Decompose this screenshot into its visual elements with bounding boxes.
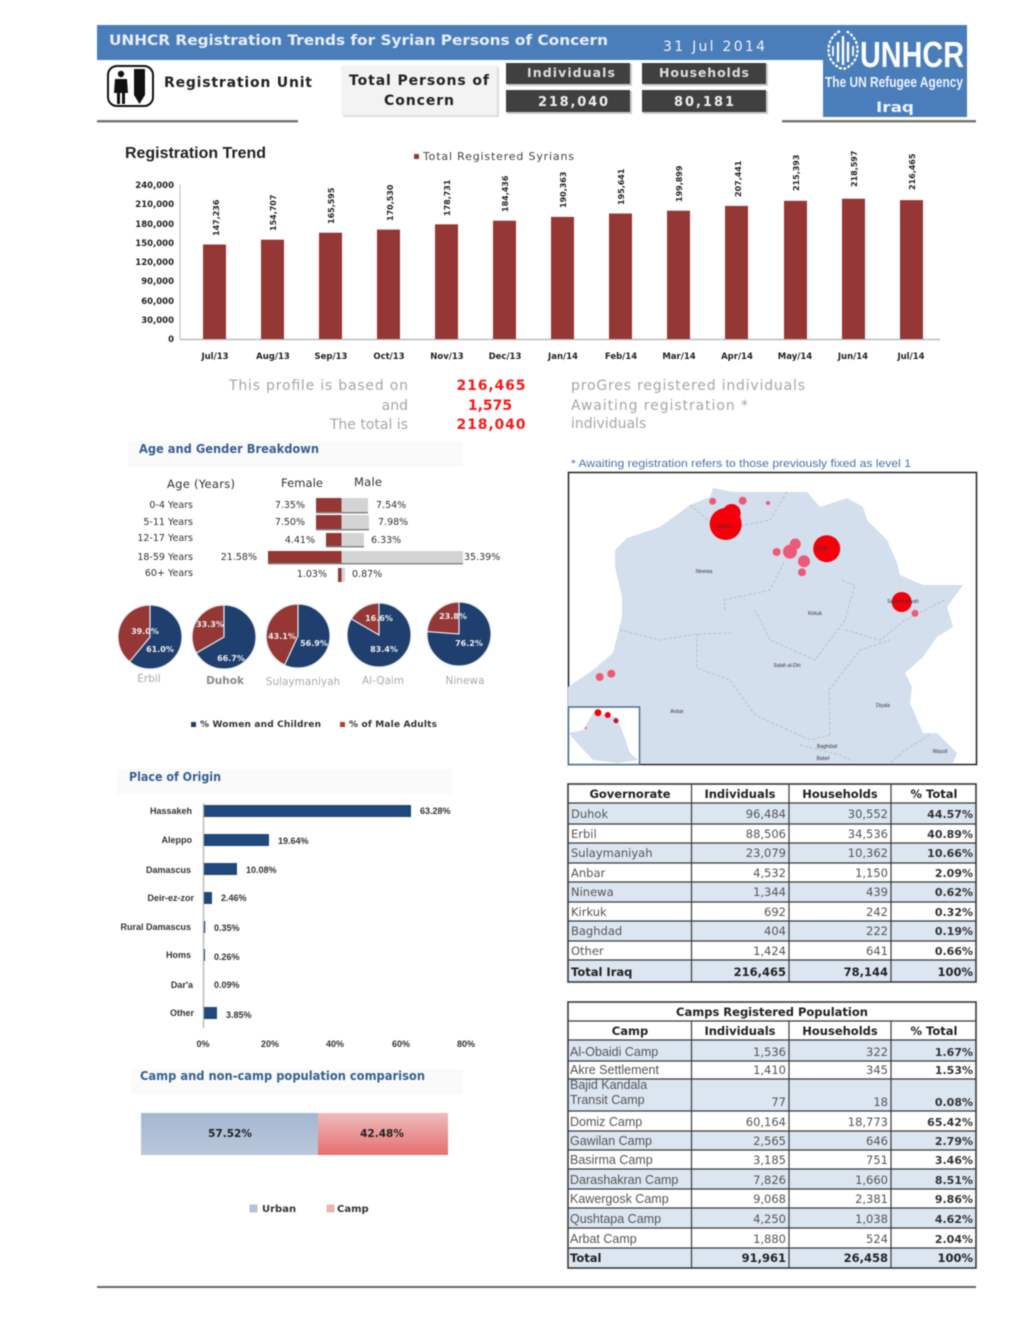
age and gender pyramid: 18-59 Years bbox=[137, 552, 193, 563]
individuals and households counters: 218,040 bbox=[538, 95, 608, 110]
table: governorates: 242 bbox=[866, 905, 888, 919]
table: governorates: 641 bbox=[866, 944, 888, 958]
UNHCR logo box: Iraq bbox=[876, 100, 914, 116]
table: camps registered population: 1,410 bbox=[753, 1063, 786, 1077]
pie: Duhok bbox=[192, 605, 256, 687]
age and gender pyramid: 7.54% bbox=[376, 500, 406, 511]
pie legend bbox=[191, 720, 437, 730]
icon: UNHCR emblem bbox=[828, 31, 858, 69]
profile summary text: 1,575 bbox=[468, 398, 512, 414]
profile summary text: 216,465 bbox=[456, 378, 526, 394]
bar chart: registration trend: Apr/14 bbox=[721, 352, 753, 362]
table: governorates: 100% bbox=[937, 965, 973, 979]
bar chart: place of origin: 0% bbox=[196, 1039, 210, 1049]
bar chart: place of origin: 2.46% bbox=[221, 893, 247, 903]
bar chart: registration trend: Oct/13 bbox=[373, 352, 405, 362]
bar chart: registration trend: 154,707 bbox=[269, 195, 278, 231]
table: governorates: 34,536 bbox=[848, 827, 888, 841]
inset map bbox=[568, 707, 640, 764]
bar chart: registration trend: 90,000 bbox=[141, 277, 174, 287]
legend: urban and camp: Camp bbox=[337, 1204, 369, 1215]
table: governorates: 23,079 bbox=[746, 846, 786, 860]
pie: Erbil: 39.0% bbox=[131, 627, 159, 636]
bar chart: registration trend: 165,595 bbox=[327, 187, 336, 224]
bar chart: registration trend: 207,441 bbox=[734, 160, 743, 197]
table: camps registered population: 1,536 bbox=[753, 1045, 786, 1059]
pie: Duhok: 33.3% bbox=[196, 620, 224, 629]
legend: urban and camp: Urban bbox=[262, 1204, 296, 1215]
bar chart: registration trend: Nov/13 bbox=[430, 352, 464, 362]
table: governorates: 96,484 bbox=[746, 807, 786, 821]
pie charts: share of women and children by location bbox=[118, 602, 491, 688]
table: camps registered population: 0.08% bbox=[935, 1096, 973, 1109]
map of Iraq with registered population bubbles: Babel bbox=[817, 756, 829, 762]
bar chart: registration trend: 240,000 bbox=[135, 181, 174, 191]
bar chart: registration trend: Dec/13 bbox=[489, 352, 521, 362]
UNHCR logo box: UNHCR bbox=[860, 34, 964, 75]
table: camps registered population: Total bbox=[570, 1251, 601, 1265]
bar chart: registration trend: 218,597 bbox=[850, 151, 859, 187]
pie: Al-Qaim bbox=[347, 603, 411, 687]
bar chart: registration trend: 120,000 bbox=[135, 258, 174, 268]
profile summary text: The total is bbox=[329, 417, 408, 433]
table: governorates: 4,532 bbox=[753, 866, 786, 880]
age and gender pyramid: Male bbox=[354, 475, 382, 489]
pie: Al-Qaim: 83.4% bbox=[370, 645, 398, 654]
bar chart: registration trend: 216,465 bbox=[908, 153, 917, 190]
pie: Sulaymaniyah bbox=[266, 604, 340, 688]
UNHCR logo box: The UN Refugee Agency bbox=[825, 74, 964, 91]
bar chart: place of origin: 3.85% bbox=[226, 1010, 252, 1020]
bar chart: registration trend: 178,731 bbox=[443, 179, 452, 216]
table: camps registered population: 3.46% bbox=[935, 1154, 973, 1167]
header banner bbox=[97, 25, 823, 60]
table: camps registered population: 9,068 bbox=[753, 1192, 786, 1206]
table: camps registered population: Camp bbox=[612, 1024, 648, 1038]
bar chart: place of origin: 10.08% bbox=[246, 865, 277, 875]
table: camps registered population: 3,185 bbox=[753, 1153, 786, 1167]
heading: registration trend: Registration Trend bbox=[125, 145, 266, 162]
UNHCR logo box bbox=[823, 25, 967, 117]
table: camps registered population: Domiz Camp bbox=[570, 1115, 642, 1129]
bar chart: place of origin: Dar'a bbox=[171, 980, 194, 990]
pie: Sulaymaniyah: Sulaymaniyah bbox=[266, 676, 340, 688]
age and gender pyramid: 0.87% bbox=[352, 569, 382, 580]
individuals and households counters: Individuals bbox=[527, 65, 615, 80]
table: governorates: 44.57% bbox=[927, 808, 973, 821]
bar chart: place of origin: 0.35% bbox=[214, 923, 240, 933]
bar chart: registration trend bbox=[135, 151, 940, 362]
table: camps registered population: Akre Settlement bbox=[570, 1063, 659, 1077]
table: governorates: 222 bbox=[866, 924, 888, 938]
table: camps registered population: % Total bbox=[911, 1024, 957, 1038]
individuals and households counters: 80,181 bbox=[674, 95, 734, 110]
total persons of concern box: Total Persons of bbox=[349, 73, 490, 89]
bar chart: registration trend: 199,899 bbox=[675, 165, 684, 202]
table: camps registered population: 1,038 bbox=[855, 1212, 888, 1226]
age and gender pyramid: 7.50% bbox=[275, 517, 305, 528]
bar chart: place of origin: 60% bbox=[392, 1039, 410, 1049]
table: camps registered population: Individuals bbox=[704, 1024, 776, 1038]
heading: age and gender breakdown bbox=[128, 441, 463, 467]
table: governorates: 0.62% bbox=[935, 886, 973, 899]
legend: urban and camp bbox=[250, 1204, 369, 1215]
table: camps registered population: 1,660 bbox=[855, 1173, 888, 1187]
map of Iraq with registered population bubbles: Salah al-Din bbox=[773, 663, 801, 669]
pie: Ninewa: 23.8% bbox=[439, 612, 467, 621]
bar chart: registration trend: 215,393 bbox=[792, 155, 801, 191]
table: governorates: 1,150 bbox=[855, 866, 888, 880]
total persons of concern box: Concern bbox=[384, 93, 454, 109]
age and gender pyramid: 5-11 Years bbox=[143, 517, 193, 528]
heading: place of origin bbox=[117, 769, 452, 794]
table: governorates: 216,465 bbox=[734, 965, 786, 979]
chart legend: Total Registered Syrians bbox=[422, 150, 574, 163]
individuals and households counters: Households bbox=[659, 65, 749, 80]
bar chart: registration trend: Jul/13 bbox=[200, 352, 229, 362]
table: governorates: 0.32% bbox=[935, 906, 973, 919]
bar chart: place of origin: Aleppo bbox=[162, 835, 193, 845]
table: governorates: 40.89% bbox=[927, 828, 973, 841]
table: governorates: Duhok bbox=[571, 807, 608, 821]
table: governorates: 692 bbox=[764, 905, 786, 919]
map of Iraq with registered population bubbles: Wassit bbox=[933, 749, 948, 755]
bar chart: registration trend: 190,363 bbox=[559, 172, 568, 208]
bar chart: registration trend: Jul/14 bbox=[896, 352, 925, 362]
table: governorates: Kirkuk bbox=[571, 905, 607, 919]
pie: Ninewa: Ninewa bbox=[446, 675, 484, 687]
table: camps registered population: 322 bbox=[866, 1045, 888, 1059]
bar chart: place of origin: Damascus bbox=[146, 865, 191, 875]
bar chart: registration trend: 210,000 bbox=[135, 200, 174, 210]
bar chart: place of origin: Hassakeh bbox=[150, 806, 192, 816]
table: camps registered population: 524 bbox=[866, 1232, 888, 1246]
bar chart: place of origin: Deir-ez-zor bbox=[147, 893, 194, 903]
table: camps registered population: 77 bbox=[771, 1095, 786, 1109]
table: governorates: Individuals bbox=[704, 787, 776, 801]
table: camps registered population: 2,565 bbox=[753, 1134, 786, 1148]
bar chart: registration trend: Jan/14 bbox=[547, 352, 578, 362]
bar chart: registration trend: 170,530 bbox=[386, 184, 395, 221]
table: governorates: 0.66% bbox=[935, 945, 973, 958]
table: governorates: % Total bbox=[911, 787, 957, 801]
age and gender pyramid: 4.41% bbox=[285, 535, 315, 546]
heading: camp and non-camp comparison: Camp and non-camp population comparison bbox=[140, 1069, 425, 1083]
table: camps registered population: Qushtapa Camp bbox=[570, 1212, 661, 1226]
table: camps registered population: 2,381 bbox=[855, 1192, 888, 1206]
table: camps registered population: 8.51% bbox=[935, 1174, 973, 1187]
bar chart: registration trend: May/14 bbox=[778, 352, 812, 362]
table: camps registered population: 2.04% bbox=[935, 1233, 973, 1246]
pie: Sulaymaniyah: 56.9% bbox=[300, 639, 328, 648]
map of Iraq with registered population bubbles bbox=[568, 472, 976, 764]
table: camps registered population: 646 bbox=[866, 1134, 888, 1148]
map of Iraq with registered population bubbles: Duhok bbox=[718, 524, 733, 530]
age and gender pyramid: 60+ Years bbox=[145, 568, 193, 579]
pie legend: % of Male Adults bbox=[349, 720, 437, 730]
bar chart: registration trend: Jun/14 bbox=[837, 352, 868, 362]
map of Iraq with registered population bubbles: Diyala bbox=[876, 703, 890, 709]
table: governorates: 78,144 bbox=[844, 965, 888, 979]
bar chart: place of origin: Rural Damascus bbox=[120, 922, 191, 932]
pie: Duhok: Duhok bbox=[206, 675, 245, 687]
bar chart: registration trend: Mar/14 bbox=[662, 352, 696, 362]
table: governorates: Households bbox=[802, 787, 878, 801]
table: camps registered population: Arbat Camp bbox=[570, 1232, 637, 1246]
pie: Al-Qaim: 16.6% bbox=[365, 614, 393, 623]
stacked bar: urban vs camp: 42.48% bbox=[360, 1128, 404, 1140]
table: camps registered population: 1.67% bbox=[935, 1046, 973, 1059]
pie: Erbil: Erbil bbox=[137, 673, 161, 685]
bar chart: registration trend: 195,641 bbox=[617, 168, 626, 205]
bar chart: place of origin: Other bbox=[170, 1008, 194, 1018]
bar chart: registration trend: Aug/13 bbox=[256, 352, 290, 362]
table: camps registered population: 65.42% bbox=[927, 1116, 973, 1129]
table: camps registered population: 60,164 bbox=[746, 1115, 786, 1129]
table: governorates: Ninewa bbox=[571, 885, 614, 899]
map of Iraq with registered population bubbles: Ninewa bbox=[696, 569, 713, 575]
registration unit label: Registration Unit bbox=[164, 75, 312, 91]
bar chart: place of origin: 0.26% bbox=[214, 952, 240, 962]
table: governorates: Total Iraq bbox=[571, 965, 632, 979]
age and gender pyramid: 7.35% bbox=[275, 500, 305, 511]
pie: Al-Qaim: Al-Qaim bbox=[362, 675, 404, 687]
table: camps registered population: Transit Camp bbox=[570, 1093, 645, 1107]
profile summary text: 218,040 bbox=[456, 417, 526, 433]
pie: Sulaymaniyah: 43.1% bbox=[268, 632, 296, 641]
bar chart: registration trend: Feb/14 bbox=[605, 352, 637, 362]
profile summary text: and bbox=[382, 398, 408, 414]
table: camps registered population: 751 bbox=[866, 1153, 888, 1167]
individuals and households counters bbox=[506, 63, 768, 114]
table: camps registered population: 26,458 bbox=[844, 1251, 888, 1265]
table: governorates: 1,424 bbox=[753, 944, 786, 958]
table: camps registered population: Gawilan Camp bbox=[570, 1134, 652, 1148]
map of Iraq with registered population bubbles: Erbil bbox=[817, 546, 827, 552]
table: governorates: 439 bbox=[866, 885, 888, 899]
table: camps registered population: 18 bbox=[873, 1095, 888, 1109]
table: camps registered population: Camps Registered Population bbox=[676, 1005, 868, 1019]
table: governorates: 30,552 bbox=[848, 807, 888, 821]
bar chart: place of origin: 20% bbox=[261, 1039, 279, 1049]
age and gender pyramid: 7.98% bbox=[378, 517, 408, 528]
table: governorates: 10.66% bbox=[927, 847, 973, 860]
bar chart: place of origin bbox=[120, 803, 475, 1049]
bar chart: place of origin: Homs bbox=[166, 950, 191, 960]
title: UNHCR Registration Trends for Syrian Persons of Concern bbox=[109, 33, 608, 49]
bar chart: registration trend: 147,236 bbox=[212, 199, 221, 236]
age and gender pyramid: 12-17 Years bbox=[137, 533, 193, 544]
bar chart: place of origin: 80% bbox=[457, 1039, 475, 1049]
table: camps registered population bbox=[568, 1002, 976, 1268]
age and gender pyramid: 21.58% bbox=[221, 552, 257, 563]
table: governorates: Erbil bbox=[571, 827, 597, 841]
bar chart: registration trend: 60,000 bbox=[141, 297, 174, 307]
pie legend: % Women and Children bbox=[200, 720, 321, 730]
footnote: * Awaiting registration refers to those previously fixed as level 1 bbox=[571, 458, 911, 470]
table: governorates: Governorate bbox=[589, 787, 671, 801]
table: camps registered population: Kawergosk Camp bbox=[570, 1192, 669, 1206]
pie: Ninewa: 76.2% bbox=[455, 639, 483, 648]
map of Iraq with registered population bubbles: Anbar bbox=[670, 709, 684, 715]
bar chart: place of origin: 40% bbox=[326, 1039, 344, 1049]
table: camps registered population: 91,961 bbox=[742, 1251, 786, 1265]
age and gender pyramid: 6.33% bbox=[371, 535, 401, 546]
heading: age and gender breakdown: Age and Gender Breakdown bbox=[139, 442, 319, 456]
table: governorates: 88,506 bbox=[746, 827, 786, 841]
table: governorates: Sulaymaniyah bbox=[571, 846, 653, 860]
table: governorates: Baghdad bbox=[571, 924, 622, 938]
map of Iraq with registered population bubbles: Baghdad bbox=[817, 744, 837, 750]
table: camps registered population: 345 bbox=[866, 1063, 888, 1077]
table: camps registered population: Bajid Kandala bbox=[570, 1078, 647, 1092]
table: governorates: Anbar bbox=[571, 866, 606, 880]
age and gender pyramid: 0-4 Years bbox=[149, 500, 193, 511]
heading: place of origin: Place of Origin bbox=[129, 770, 221, 784]
profile summary text: individuals bbox=[571, 416, 646, 432]
age and gender pyramid: 35.39% bbox=[464, 552, 500, 563]
pie: Erbil bbox=[118, 605, 182, 685]
bar chart: registration trend: 150,000 bbox=[135, 239, 174, 249]
bar chart: registration trend: 180,000 bbox=[135, 220, 174, 230]
map of Iraq with registered population bubbles: Kirkuk bbox=[808, 611, 822, 617]
date: 31 Jul 2014 bbox=[663, 39, 765, 55]
profile summary text: Awaiting registration * bbox=[571, 398, 748, 414]
heading: camp and non-camp comparison bbox=[131, 1069, 463, 1094]
pie: Erbil: 61.0% bbox=[146, 645, 174, 654]
profile summary text: This profile is based on bbox=[228, 378, 408, 394]
bar chart: registration trend: Sep/13 bbox=[315, 352, 348, 362]
age and gender pyramid: Age (Years) bbox=[167, 477, 235, 491]
age and gender pyramid: 1.03% bbox=[297, 569, 327, 580]
table: camps registered population: 2.79% bbox=[935, 1135, 973, 1148]
bar chart: place of origin: 0.09% bbox=[214, 980, 240, 990]
table: camps registered population: 9.86% bbox=[935, 1193, 973, 1206]
table: camps registered population: 100% bbox=[937, 1251, 973, 1265]
table: camps registered population: 18,773 bbox=[848, 1115, 888, 1129]
pie: Ninewa bbox=[427, 602, 491, 687]
table: governorates: 2.09% bbox=[935, 867, 973, 880]
table: camps registered population: 1,880 bbox=[753, 1232, 786, 1246]
table: governorates: 0.19% bbox=[935, 925, 973, 938]
bar chart: place of origin: 63.28% bbox=[420, 806, 451, 816]
table: camps registered population: 7,826 bbox=[753, 1173, 786, 1187]
icon: registration person and pencil bbox=[108, 66, 153, 106]
table: governorates: 10,362 bbox=[848, 846, 888, 860]
table: camps registered population: Basirma Camp bbox=[570, 1153, 653, 1167]
stacked bar: urban vs camp bbox=[141, 1113, 448, 1155]
bar chart: registration trend: 184,436 bbox=[501, 175, 510, 212]
table: governorates: 1,344 bbox=[753, 885, 786, 899]
age and gender pyramid bbox=[137, 475, 500, 582]
bar chart: place of origin: 19.64% bbox=[278, 836, 309, 846]
table: camps registered population: 4,250 bbox=[753, 1212, 786, 1226]
pie: Duhok: 66.7% bbox=[217, 654, 245, 663]
profile summary text: proGres registered individuals bbox=[571, 378, 805, 394]
total persons of concern box bbox=[341, 65, 499, 117]
bar chart: registration trend: 30,000 bbox=[141, 316, 174, 326]
map of Iraq with registered population bubbles: Sulaymaniyah bbox=[887, 599, 919, 605]
table: camps registered population: 4.62% bbox=[935, 1213, 973, 1226]
table: camps registered population: Households bbox=[802, 1024, 878, 1038]
stacked bar: urban vs camp: 57.52% bbox=[208, 1128, 252, 1140]
bar chart: registration trend: 0 bbox=[168, 335, 174, 345]
table: governorates bbox=[568, 784, 976, 982]
table: camps registered population: 1.53% bbox=[935, 1064, 973, 1077]
table: camps registered population: Al-Obaidi Camp bbox=[570, 1045, 658, 1059]
age and gender pyramid: Female bbox=[281, 476, 323, 490]
table: camps registered population: Darashakran Camp bbox=[570, 1173, 678, 1187]
profile summary text bbox=[228, 378, 805, 433]
table: governorates: 404 bbox=[764, 924, 786, 938]
table: governorates: Other bbox=[571, 944, 604, 958]
